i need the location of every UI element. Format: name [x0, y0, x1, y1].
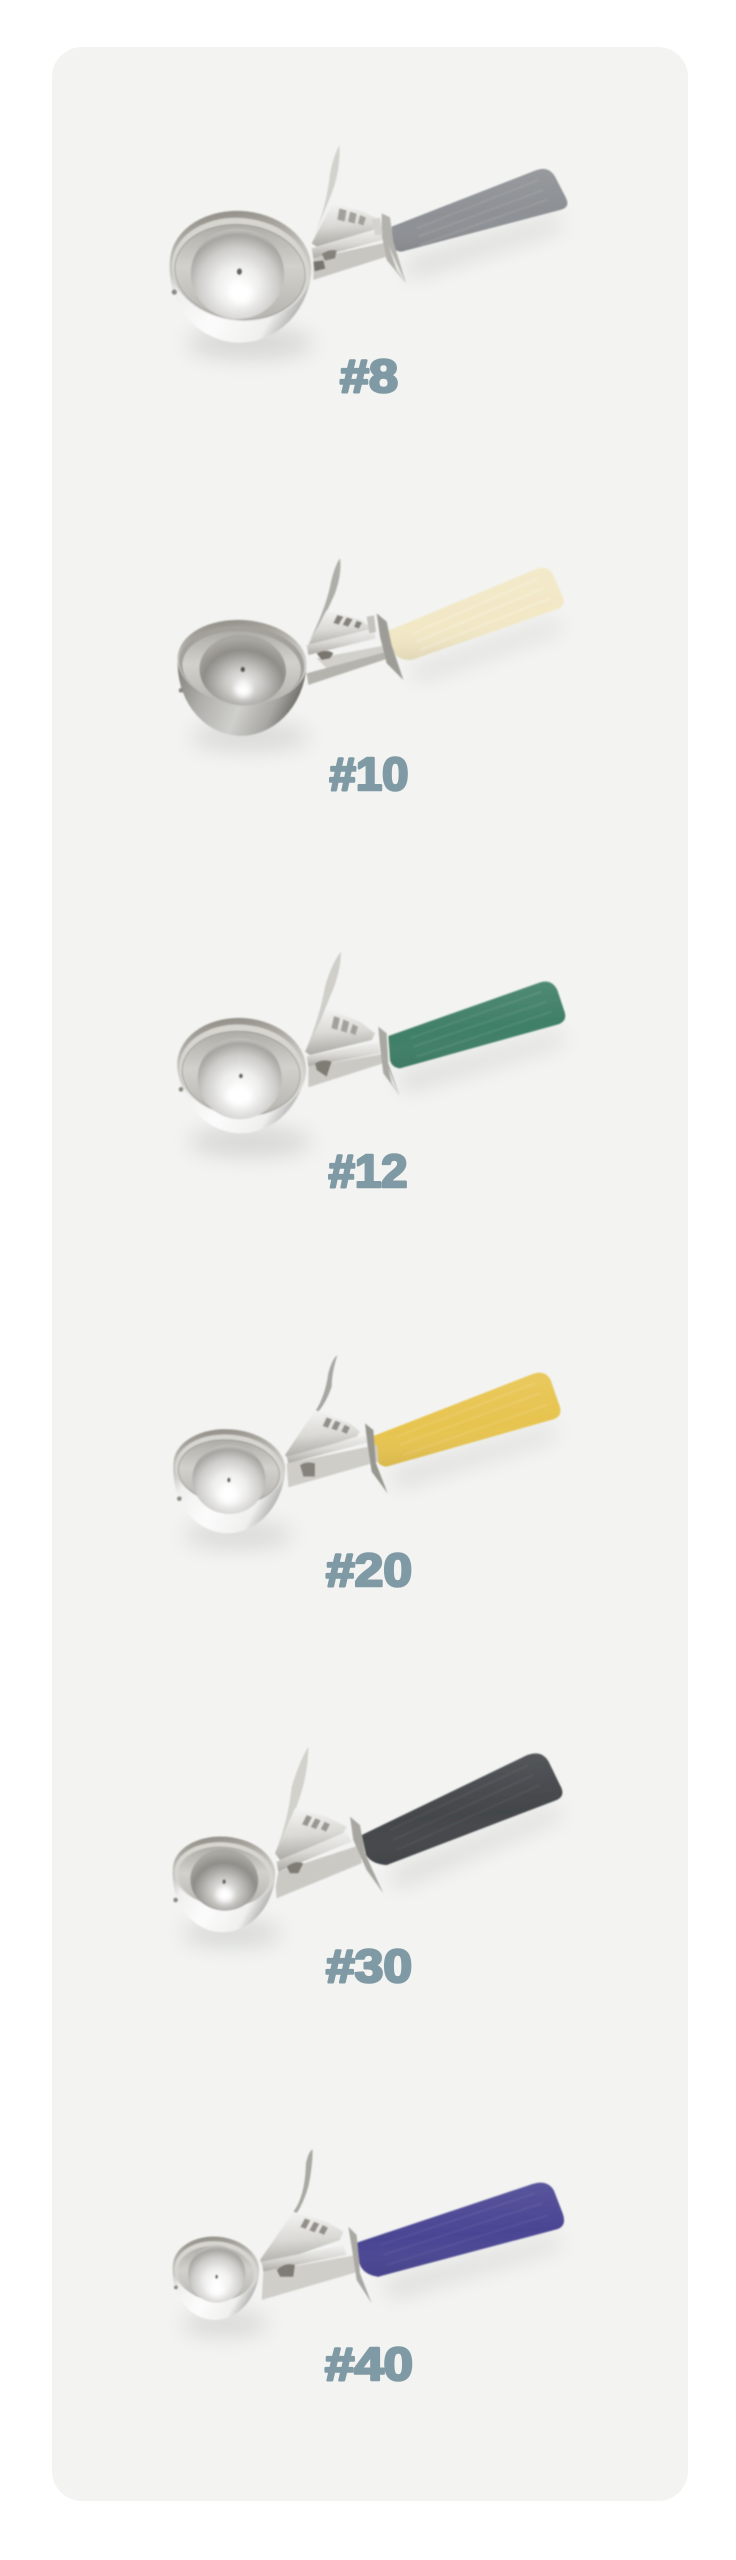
scoop #10 — [172, 558, 564, 750]
icon: thumb lever — [275, 1747, 347, 1860]
icon: handle — [373, 1373, 560, 1467]
icon: rivet — [177, 1496, 182, 1501]
shadow — [187, 217, 563, 358]
icon: bowl — [172, 616, 309, 740]
icon: bowl — [168, 1832, 278, 1937]
shadow — [182, 2237, 563, 2335]
icon: handle — [392, 169, 567, 252]
label: #40: #40 — [325, 2338, 413, 2390]
label: #8: #8 — [340, 350, 398, 402]
icon: handle — [357, 2183, 564, 2277]
scoop body — [168, 1355, 560, 1538]
scoop body — [172, 558, 564, 740]
scoop #30 — [168, 1747, 563, 1945]
icon: bowl — [168, 1425, 288, 1538]
scoop #40 — [168, 2149, 564, 2335]
scoop #8 — [162, 145, 567, 358]
icon: rivet — [179, 1087, 183, 1092]
icon: handle — [388, 981, 565, 1068]
shadow — [182, 1807, 563, 1945]
icon: rivet — [174, 2285, 178, 2289]
scoop body — [162, 145, 567, 350]
icon: bowl — [162, 204, 317, 350]
scoop body — [168, 2149, 564, 2324]
icon: handle — [362, 1753, 562, 1865]
scoop body — [172, 952, 565, 1139]
label: #20: #20 — [326, 1544, 412, 1596]
icon: thumb lever — [285, 1355, 360, 1458]
icon: thumb lever — [305, 952, 375, 1055]
scoop #12 — [172, 952, 567, 1156]
icon: guard and shafts — [262, 2227, 372, 2303]
label: #12: #12 — [328, 1145, 408, 1197]
icon: thumb lever — [308, 558, 370, 648]
icon: handle — [388, 567, 564, 660]
label: #30: #30 — [326, 1940, 412, 1992]
shadow — [183, 1427, 560, 1548]
shadow — [190, 620, 563, 750]
icon: rivet — [179, 688, 183, 693]
icon: guard and shafts — [307, 613, 403, 685]
icon: guard and shafts — [276, 1817, 383, 1898]
icon: bowl — [172, 1013, 310, 1139]
icon: guard and shafts — [287, 1423, 388, 1493]
icon: guard and shafts — [312, 213, 406, 283]
scoop body — [168, 1747, 562, 1937]
icon: bowl — [168, 2233, 262, 2324]
shadow — [188, 1033, 567, 1156]
icon: thumb lever — [260, 2149, 343, 2267]
icon: rivet — [173, 1898, 178, 1902]
icon: thumb lever — [312, 145, 377, 247]
icon: guard and shafts — [307, 1027, 399, 1095]
icon: rivet — [172, 289, 177, 295]
scoop #20 — [168, 1355, 560, 1548]
label: #10: #10 — [330, 748, 408, 800]
